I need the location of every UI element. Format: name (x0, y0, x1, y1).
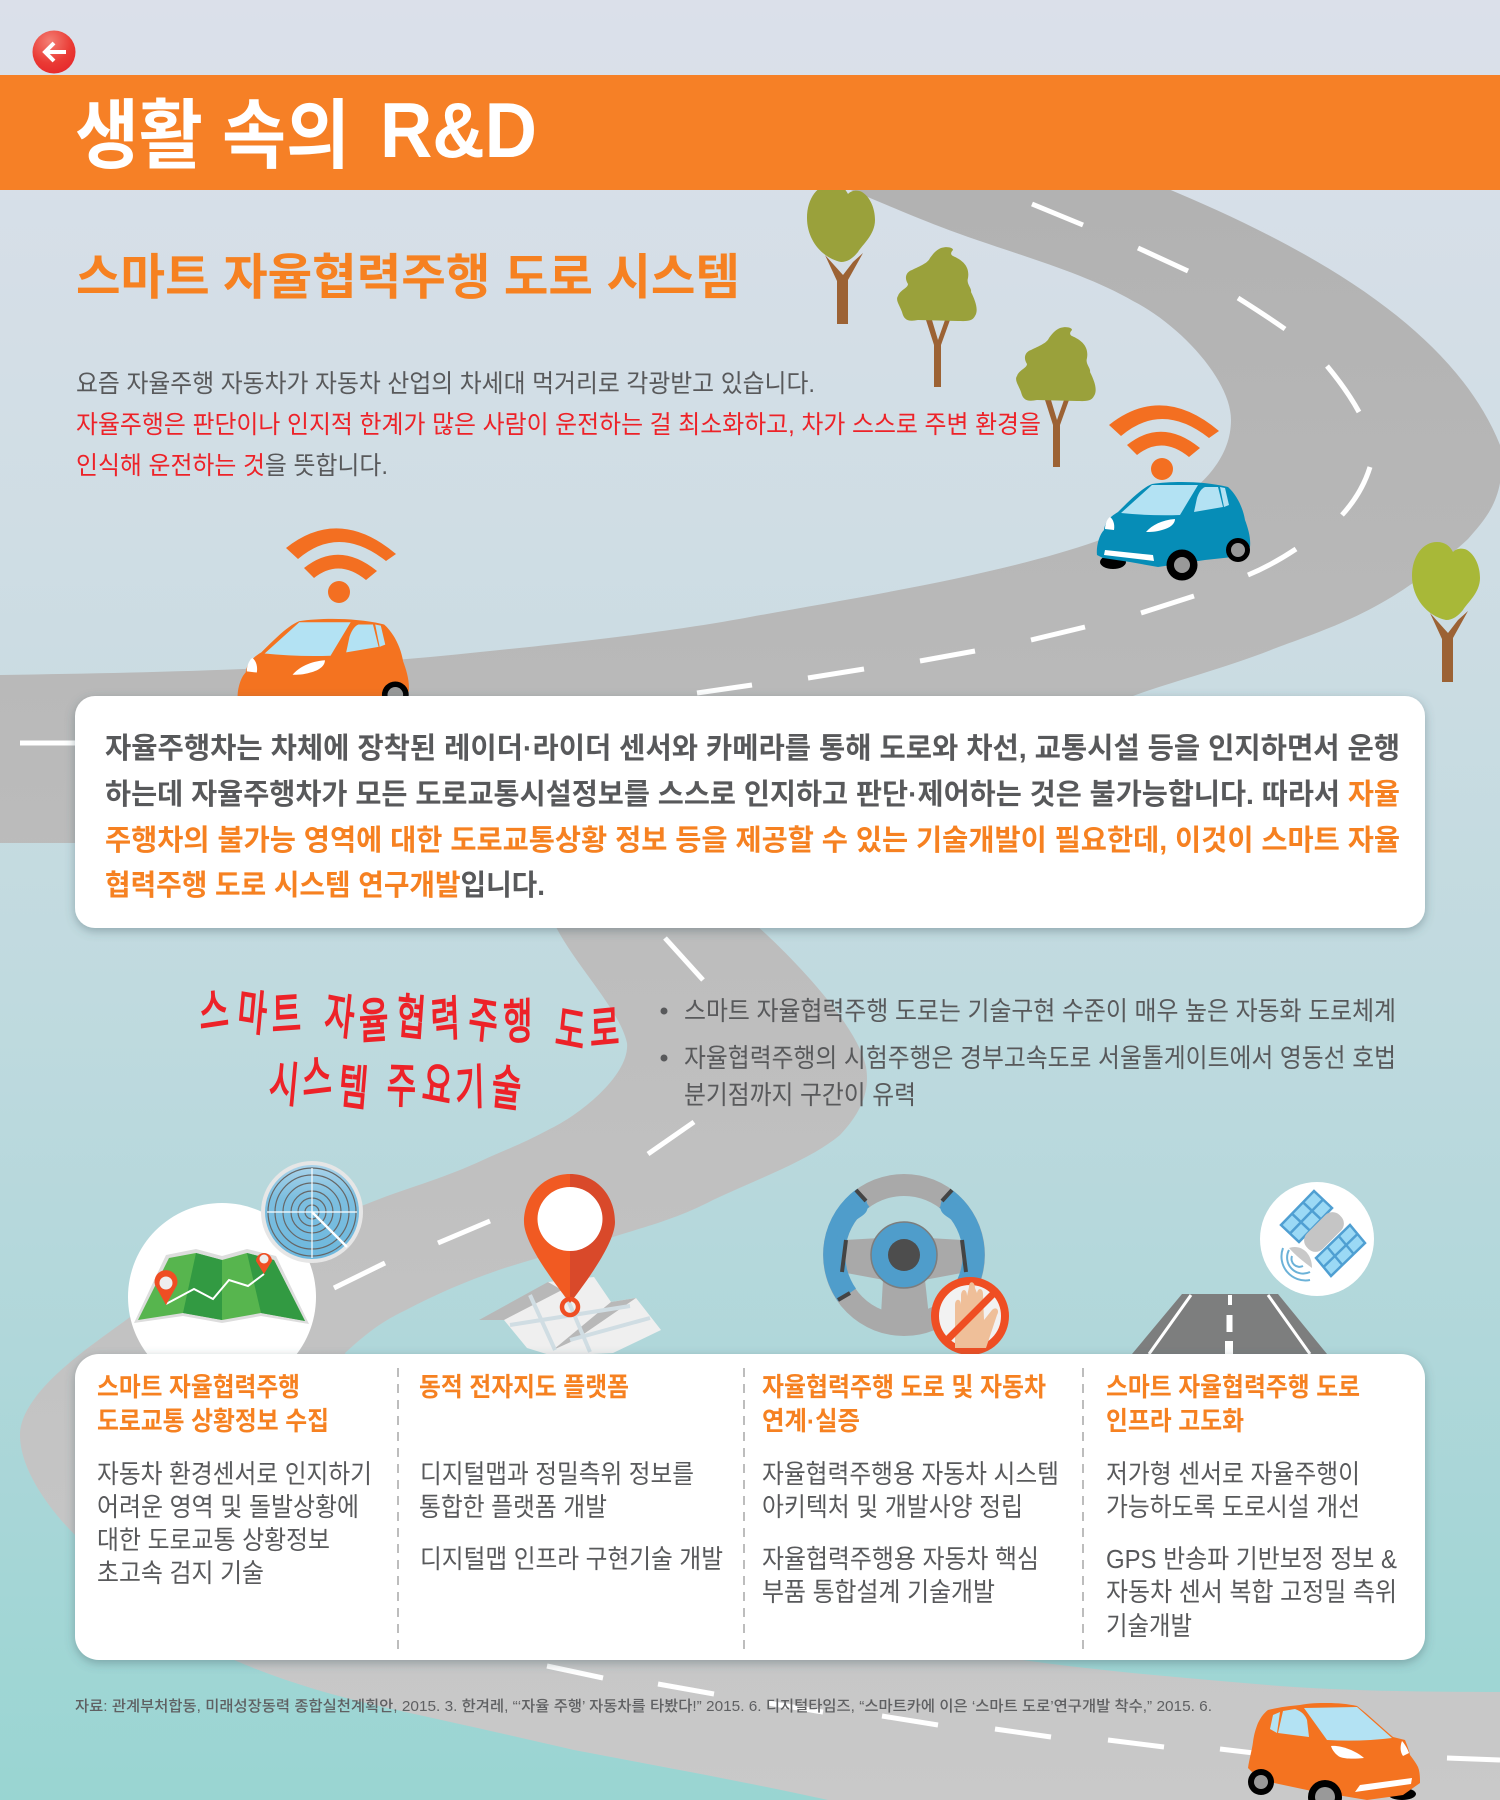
explanation text: 자율주행차는 차체에 장착된 레이더·라이더 센서와 카메라를 통해 도로와 차선, 교통시설 등을 인지하면서 운행 (105, 732, 1400, 765)
back button (32, 30, 76, 74)
intro paragraph: 인식해 운전하는 것을 뜻합니다. (76, 452, 388, 480)
icon: map and radar (128, 1161, 363, 1354)
handwritten heading: 시스템 주요기술 (267, 1047, 524, 1122)
orange car bottom (1248, 1703, 1420, 1800)
column 4: 기술개발 (1106, 1611, 1192, 1641)
column 3 (762, 1372, 1059, 1607)
tree 1 (807, 184, 875, 324)
tree 3 (1016, 327, 1096, 467)
column 4: 가능하도록 도로시설 개선 (1106, 1492, 1360, 1522)
intro paragraph (76, 370, 1041, 480)
column 3: 부품 통합설계 기술개발 (762, 1577, 995, 1607)
source note: 자료: 관계부처합동, 미래성장동력 종합실천계획안, 2015. 3. 한겨레, “‘자율 주행’ 자동차를 타봤다!” 2015. 6. 디지털타임즈, “스마트카에 이은 ‘스마트 도로’연구개발 착수,” 2015. 6. (75, 1698, 1212, 1715)
column 3: 자율협력주행용 자동차 시스템 (762, 1459, 1059, 1489)
column 2: 디지털맵 인프라 구현기술 개발 (420, 1544, 723, 1574)
column 1: 자동차 환경센서로 인지하기 (97, 1459, 372, 1489)
column 4: 저가형 센서로 자율주행이 (1106, 1459, 1360, 1489)
title (75, 86, 537, 179)
handwritten heading (196, 981, 622, 1122)
icon: steering wheel with no-hands sign (834, 1185, 1005, 1351)
icon: wifi signal above orange car (286, 528, 396, 603)
explanation text (105, 732, 1400, 902)
column 1: 스마트 자율협력주행 (97, 1372, 300, 1402)
tree 4 (1412, 542, 1480, 682)
column 4 (1106, 1372, 1397, 1641)
column 2: 동적 전자지도 플랫폼 (419, 1372, 629, 1402)
column 1: 대한 도로교통 상황정보 (97, 1525, 330, 1555)
subtitle: 스마트 자율협력주행 도로 시스템 (76, 251, 740, 305)
icon: wifi signal above blue car (1109, 405, 1219, 480)
road: lower section (20, 925, 1500, 1800)
title: R&D (380, 86, 537, 174)
title banner (0, 75, 1500, 190)
column 3: 자율협력주행용 자동차 핵심 (762, 1544, 1039, 1574)
column 1: 어려운 영역 및 돌발상황에 (97, 1492, 359, 1522)
bullet list: 분기점까지 구간이 유력 (684, 1080, 916, 1110)
column 4: 자동차 센서 복합 고정밀 측위 (1106, 1577, 1397, 1607)
road: upper section (0, 188, 1500, 843)
explanation text: 주행차의 불가능 영역에 대한 도로교통상황 정보 등을 제공할 수 있는 기술개발이 필요한데, 이것이 스마트 자율 (105, 824, 1400, 857)
column 2 (419, 1372, 723, 1574)
bullet list: 스마트 자율협력주행 도로는 기술구현 수준이 매우 높은 자동화 도로체계 (684, 996, 1396, 1026)
column 2: 디지털맵과 정밀측위 정보를 (420, 1459, 694, 1489)
bullet list: 자율협력주행의 시험주행은 경부고속도로 서울톨게이트에서 영동선 호법 (684, 1043, 1396, 1073)
column 4: GPS 반송파 기반보정 정보 & (1106, 1544, 1397, 1574)
column 2: 통합한 플랫폼 개발 (419, 1492, 607, 1522)
icon: road with satellite (1132, 1182, 1374, 1354)
column 4: 인프라 고도화 (1106, 1406, 1244, 1436)
panel: four technologies (75, 1354, 1425, 1660)
orange car top (238, 619, 409, 714)
tree 2 (897, 247, 977, 387)
icon: location pin on map (479, 1174, 661, 1356)
panel: explanation box (75, 696, 1425, 928)
explanation text: 협력주행 도로 시스템 연구개발입니다. (105, 869, 545, 902)
column 4: 스마트 자율협력주행 도로 (1106, 1372, 1360, 1402)
intro paragraph: 요즘 자율주행 자동차가 자동차 산업의 차세대 먹거리로 각광받고 있습니다. (76, 370, 815, 398)
column 1: 도로교통 상황정보 수집 (97, 1406, 329, 1436)
column 1: 초고속 검지 기술 (97, 1558, 264, 1588)
intro paragraph: 자율주행은 판단이나 인지적 한계가 많은 사람이 운전하는 걸 최소화하고, 차가 스스로 주변 환경을 (76, 411, 1041, 439)
column 3: 자율협력주행 도로 및 자동차 (762, 1372, 1046, 1402)
explanation text: 하는데 자율주행차가 모든 도로교통시설정보를 스스로 인지하고 판단·제어하는 것은 불가능합니다. 따라서 자율 (105, 778, 1400, 811)
blue car (1097, 482, 1250, 580)
column 1 (97, 1372, 372, 1588)
bullet list (660, 996, 1396, 1110)
column 3: 연계·실증 (762, 1406, 860, 1436)
title: 생활 속의 (75, 94, 350, 179)
handwritten heading: 스마트 자율협력주행 도로 (196, 981, 622, 1061)
column 3: 아키텍처 및 개발사양 정립 (762, 1492, 1023, 1522)
